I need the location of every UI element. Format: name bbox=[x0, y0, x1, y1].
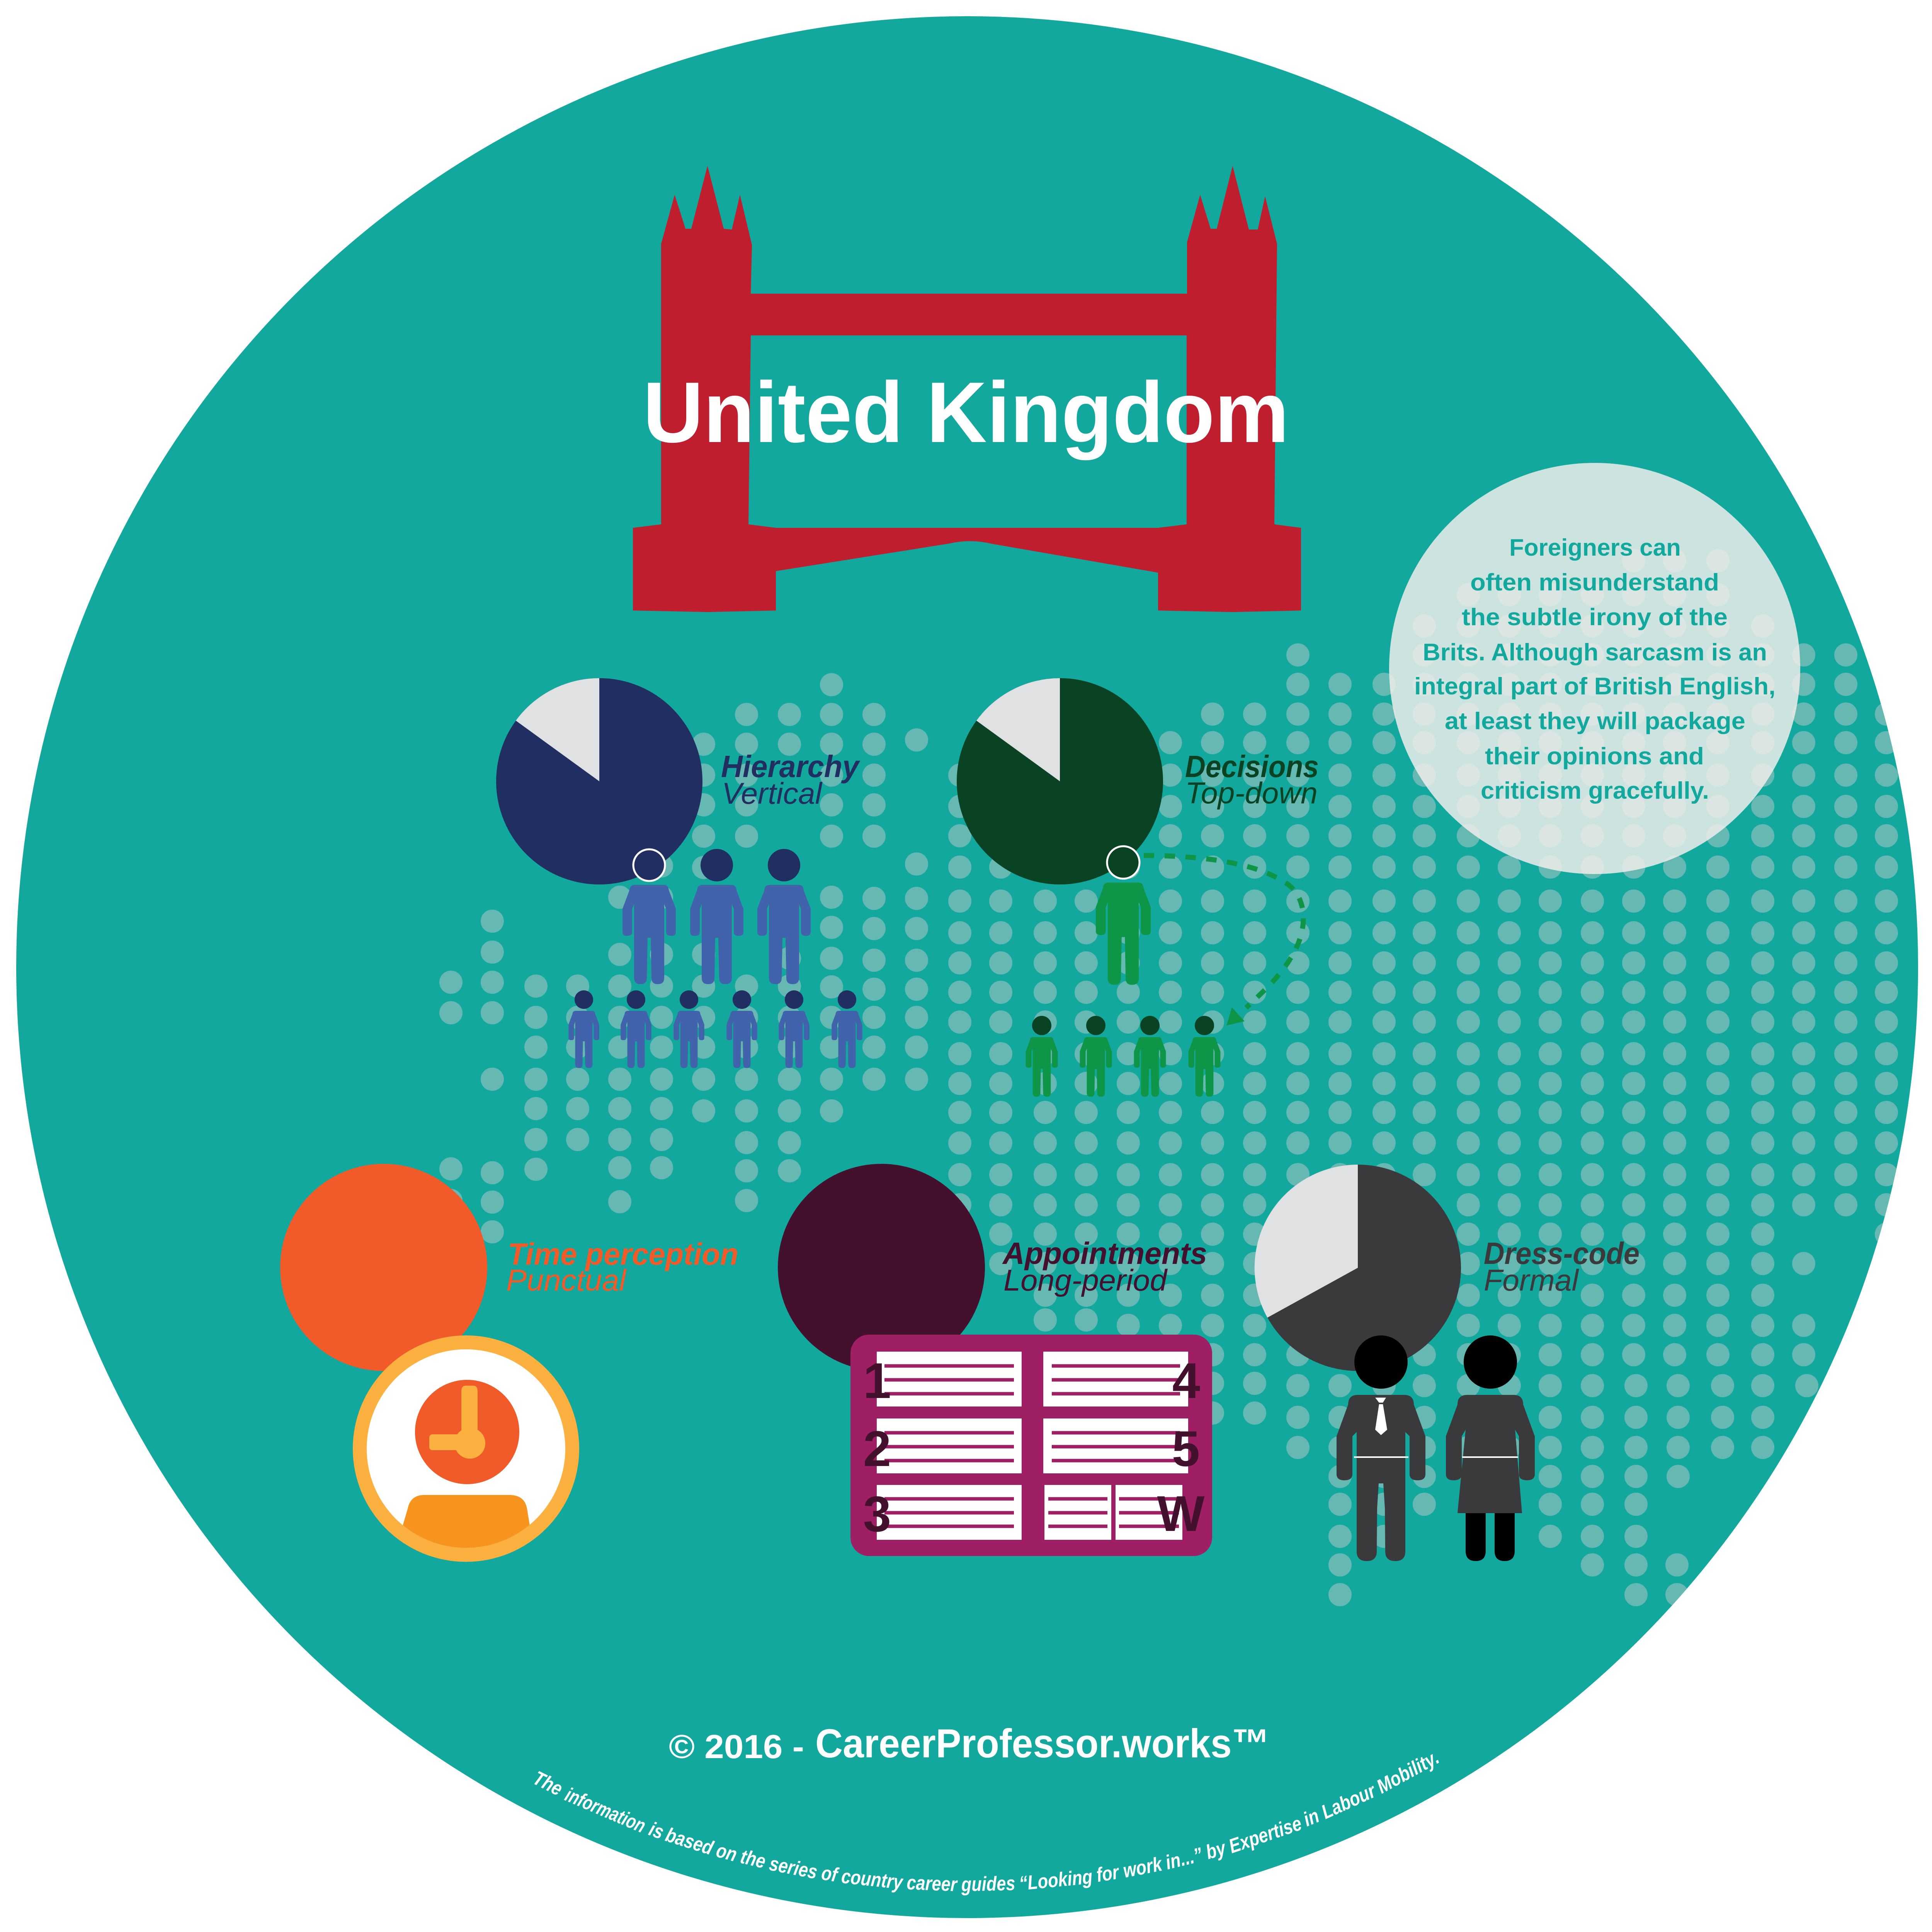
icon: man in suit bbox=[1337, 1335, 1425, 1561]
arrow: top-down dashed bbox=[1144, 855, 1303, 1026]
label: time perception bbox=[506, 1237, 738, 1297]
callout: irony note: often misunderstand bbox=[1470, 569, 1719, 596]
panel: dress-code bbox=[1255, 1165, 1639, 1561]
source note on curved baseline: Mobility. bbox=[1373, 1746, 1443, 1798]
source note on curved baseline: by bbox=[1203, 1837, 1229, 1864]
label: dress-code: Formal bbox=[1484, 1263, 1580, 1297]
source note on curved baseline: on bbox=[714, 1839, 739, 1866]
callout: irony note: Brits. Although sarcasm is an bbox=[1423, 639, 1767, 666]
icon: weekly calendar bbox=[850, 1335, 1212, 1556]
circle: time perception bbox=[280, 1164, 487, 1371]
icon: three managers bbox=[622, 849, 811, 984]
label: hierarchy bbox=[721, 749, 860, 810]
dotted world map bbox=[451, 561, 1886, 1595]
callout: irony note: their opinions and bbox=[1485, 743, 1704, 770]
icon: weekly calendar: 3 bbox=[863, 1486, 891, 1542]
label: appointments bbox=[1002, 1236, 1207, 1297]
source note on curved baseline: The bbox=[529, 1767, 566, 1800]
copyright line: © 2016 - bbox=[669, 1728, 804, 1765]
source note on curved baseline: information bbox=[562, 1783, 649, 1837]
callout: irony note: at least they will package bbox=[1445, 708, 1745, 735]
icon: Tower Bridge bbox=[633, 166, 1301, 612]
copyright line: CareerProfessor.works™ bbox=[815, 1721, 1270, 1766]
panel: hierarchy bbox=[496, 678, 862, 1068]
label: appointments: Long-period bbox=[1003, 1263, 1168, 1297]
label: dress-code bbox=[1484, 1236, 1639, 1297]
source note on curved baseline: the bbox=[738, 1845, 768, 1873]
source note on curved baseline: based bbox=[663, 1824, 716, 1860]
callout: irony note bbox=[1389, 463, 1800, 874]
callout: irony note: Foreigners can bbox=[1509, 534, 1681, 561]
icon: weekly calendar: 2 bbox=[863, 1420, 891, 1477]
source note on curved baseline: series bbox=[767, 1852, 819, 1884]
icon: four staff bbox=[1026, 1016, 1220, 1097]
icon: decision maker bbox=[1096, 846, 1151, 985]
circle: appointments bbox=[778, 1164, 985, 1371]
source note on curved baseline: in bbox=[1300, 1804, 1322, 1831]
label: decisions bbox=[1185, 749, 1319, 810]
panel: time perception bbox=[280, 1164, 738, 1584]
label: time perception: Time perception bbox=[508, 1237, 738, 1271]
icon: clock and person bbox=[353, 1335, 579, 1584]
source note on curved baseline: career bbox=[906, 1872, 958, 1896]
icon: weekly calendar: 5 bbox=[1172, 1420, 1200, 1477]
pie chart: decisions bbox=[957, 678, 1163, 884]
label: dress-code: Dress-code bbox=[1484, 1236, 1639, 1270]
label: appointments: Appointments bbox=[1002, 1236, 1207, 1270]
label: hierarchy: Vertical bbox=[722, 776, 823, 810]
source note on curved baseline: “Looking bbox=[1018, 1866, 1094, 1895]
source note on curved baseline: for bbox=[1095, 1861, 1121, 1886]
title: United Kingdom bbox=[643, 364, 1289, 461]
source note on curved baseline: guides bbox=[961, 1872, 1015, 1896]
label: hierarchy: Hierarchy bbox=[721, 749, 860, 784]
source note on curved baseline: Labour bbox=[1318, 1779, 1380, 1823]
icon: woman in skirt bbox=[1446, 1335, 1535, 1561]
callout: irony note: criticism gracefully. bbox=[1481, 777, 1709, 804]
source note on curved baseline: in...” bbox=[1163, 1844, 1205, 1874]
panel: appointments bbox=[778, 1164, 1212, 1556]
callout: irony note: the subtle irony of the bbox=[1462, 604, 1728, 631]
icon: weekly calendar: 4 bbox=[1172, 1352, 1200, 1409]
pie chart: dress-code bbox=[1255, 1165, 1461, 1371]
source note on curved baseline: is bbox=[646, 1818, 667, 1844]
source note on curved baseline: Expertise bbox=[1226, 1812, 1304, 1858]
label: decisions: Top-down bbox=[1185, 776, 1318, 810]
callout: irony note: integral part of British English, bbox=[1414, 673, 1776, 700]
source note on curved baseline: of bbox=[820, 1862, 840, 1886]
icon: six staff bbox=[568, 990, 862, 1068]
label: decisions: Decisions bbox=[1185, 749, 1319, 784]
label: time perception: Punctual bbox=[506, 1263, 627, 1297]
source note on curved baseline: country bbox=[840, 1865, 905, 1894]
icon: weekly calendar: W bbox=[1157, 1485, 1205, 1542]
source note on curved baseline: work bbox=[1121, 1853, 1165, 1882]
icon: weekly calendar: 1 bbox=[863, 1352, 891, 1409]
pie chart: hierarchy bbox=[496, 678, 702, 884]
source note on curved baseline bbox=[529, 1746, 1443, 1896]
panel: decisions bbox=[957, 678, 1319, 1097]
